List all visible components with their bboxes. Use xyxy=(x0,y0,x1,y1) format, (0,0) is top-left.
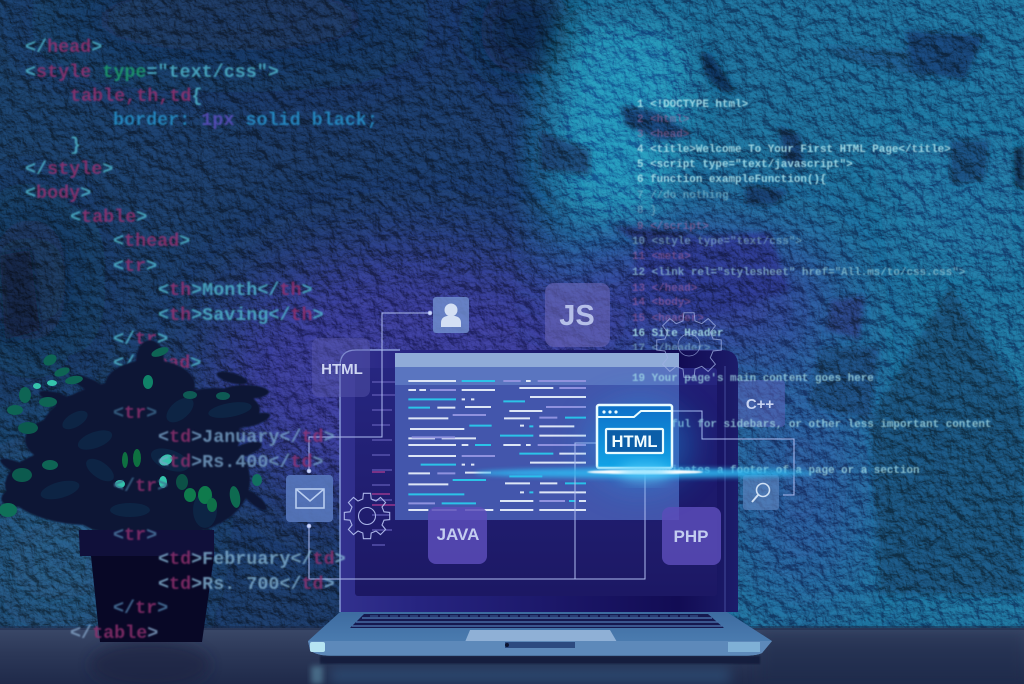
right code overlay: 21 <aside> xyxy=(632,404,697,416)
right code overlay: 16 Site Header xyxy=(632,328,724,340)
right code overlay: 5 <script type="text/javascript"> xyxy=(637,159,853,171)
right code overlay: 7 //do nothing xyxy=(637,190,728,202)
laptop front edge xyxy=(308,641,772,656)
icon: gear right xyxy=(657,313,721,377)
code overlay across plant: <td>January</td> xyxy=(158,427,335,448)
right code overlay: 8 } xyxy=(637,205,657,217)
code overlay across plant: <td>Rs. 700</td> xyxy=(158,574,335,595)
lines of code over the laptop edge: 19 Your page's main content goes here xyxy=(632,373,874,385)
badge: JS xyxy=(545,283,610,347)
plant xyxy=(0,340,272,642)
code overlay across plant: </table> xyxy=(70,623,158,644)
left code overlay: </tr> xyxy=(113,329,168,350)
right code overlay: 11 <meta> xyxy=(632,251,691,263)
badge: PHP xyxy=(662,507,721,565)
connector lines xyxy=(307,311,794,579)
left side editor ghost xyxy=(372,382,420,545)
left code overlay: </head> xyxy=(25,37,102,58)
icon: HTML window: HTML xyxy=(612,432,658,451)
badge: PHP: PHP xyxy=(674,527,708,546)
icon: mail xyxy=(286,475,333,522)
left code overlay: </thead> xyxy=(113,353,201,374)
green leaves xyxy=(0,345,262,517)
badge: HTML xyxy=(312,338,370,397)
left code overlay: <table> xyxy=(70,207,147,228)
right code overlay xyxy=(632,99,965,492)
translucent code panel xyxy=(395,353,725,520)
icon: user xyxy=(433,297,469,333)
code overlay across plant: <tr> xyxy=(113,525,157,546)
right code overlay: 1 <!DOCTYPE html> xyxy=(637,99,748,111)
dark leaves xyxy=(39,393,253,528)
left code overlay: <th>Saving</th> xyxy=(158,305,324,326)
lines of code over the laptop edge xyxy=(632,373,991,477)
keyboard deck xyxy=(308,612,772,656)
left code overlay: } xyxy=(70,135,81,156)
laptop inner screen xyxy=(355,368,717,596)
icon: gear left xyxy=(344,493,390,539)
left code overlay: <style type="text/css"> xyxy=(25,62,279,83)
right code overlay: 4 <title>Welcome To Your First HTML Page</title> xyxy=(637,144,951,156)
badge: JAVA: JAVA xyxy=(437,525,479,544)
right code overlay: 20 </article> xyxy=(632,389,717,401)
right code overlay: 23 </aside> xyxy=(632,434,704,446)
desk xyxy=(0,626,1024,684)
code overlay across plant: </tr> xyxy=(113,598,168,619)
left code overlay: <body> xyxy=(25,183,91,204)
right code overlay: 12 <link rel="stylesheet" href="All.ms/to/css.css"> xyxy=(632,267,965,279)
left code overlay: border: 1px solid black; xyxy=(113,110,378,131)
laptop xyxy=(308,350,772,684)
badge: C++ xyxy=(738,380,785,427)
left code overlay: <tr> xyxy=(113,256,157,277)
lines of code over the laptop edge: 25 Indicates a footer of a page or a section xyxy=(632,465,920,477)
left code overlay: table,th,td{ xyxy=(70,86,202,107)
keyboard keys xyxy=(350,614,724,628)
flower pot xyxy=(79,530,214,642)
right code overlay: 3 <head> xyxy=(637,129,689,141)
right code overlay: 15 <header> xyxy=(632,313,704,325)
icon: HTML window xyxy=(597,405,672,468)
right code overlay: 26 </footer> xyxy=(632,480,710,492)
lines of code over the laptop edge: 22 Useful for sidebars, or other less important content xyxy=(632,419,991,431)
code overlay across plant: <td>February</td> xyxy=(158,549,346,570)
laptop shadow and reflection xyxy=(311,656,760,684)
right code overlay: 9 </script> xyxy=(637,221,709,233)
trackpad xyxy=(465,630,617,642)
screen outline xyxy=(340,350,725,612)
right code overlay: 17 </header> xyxy=(632,343,710,355)
badge: C++: C++ xyxy=(746,396,774,413)
right code overlay: 10 <style type="text/css"> xyxy=(632,236,802,248)
badge: JAVA xyxy=(428,507,487,564)
badge: HTML: HTML xyxy=(321,361,363,378)
left code overlay: <th>Month</th> xyxy=(158,280,313,301)
right code overlay: 18 <article> xyxy=(632,359,710,371)
left code overlay: </style> xyxy=(25,159,113,180)
left code overlay: <thead> xyxy=(113,231,190,252)
code line bars xyxy=(408,381,586,510)
icon: search xyxy=(743,475,779,510)
code overlay across plant: <td>Rs.400</td> xyxy=(158,452,324,473)
badge: JS: JS xyxy=(559,300,595,332)
left code overlay xyxy=(25,37,378,374)
code overlay across plant xyxy=(70,403,346,644)
right code overlay: 6 function exampleFunction(){ xyxy=(637,174,827,186)
right code overlay: 14 <body> xyxy=(632,297,691,309)
right code overlay: 13 </head> xyxy=(632,283,697,295)
right code overlay: 2 <html> xyxy=(637,114,689,126)
laptop screen bezel xyxy=(340,350,738,612)
bright leaves xyxy=(33,380,175,488)
code overlay across plant: </tr> xyxy=(113,476,168,497)
light flare xyxy=(475,462,815,482)
code overlay across plant: <tr> xyxy=(113,403,157,424)
plant foliage mass xyxy=(0,340,272,537)
glow behind HTML icon xyxy=(588,403,692,487)
right code overlay: 24 <footer> xyxy=(632,449,704,461)
